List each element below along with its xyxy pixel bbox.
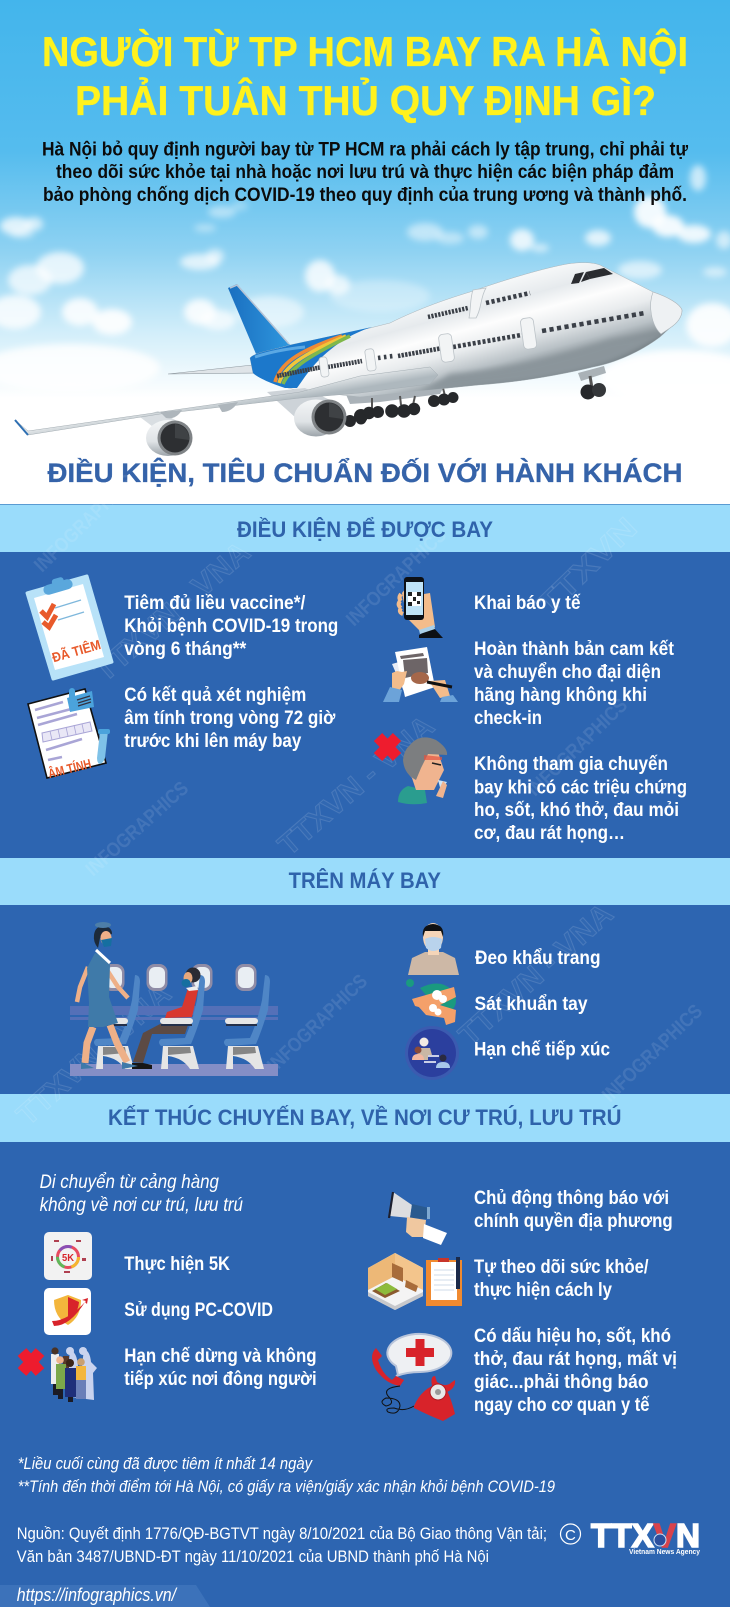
text: do not fly with symptoms: cơ, đau rát họng…: [474, 823, 625, 844]
text: notify local authority: chính quyền địa phương: [474, 1211, 673, 1232]
footnotes: [18, 1454, 555, 1496]
illustration: aircraft cabin with attendant and passenger: [70, 922, 278, 1076]
text: negative test condition: Có kết quả xét nghiệm: [124, 685, 306, 706]
icon: negative test document: [28, 688, 110, 781]
text: limit contact: Hạn chế tiếp xúc: [474, 1040, 610, 1060]
text: health declaration: Khai báo y tế: [474, 593, 581, 614]
text: notify local authority: Chủ động thông báo với: [474, 1188, 669, 1209]
text: vaccine condition: Khỏi bệnh COVID-19 trong: [124, 616, 338, 637]
text: notify local authority: [474, 1188, 673, 1232]
text: wear mask: Đeo khẩu trang: [475, 948, 600, 969]
heading: end of flight: KẾT THÚC CHUYẾN BAY, VỀ NƠI CƯ TRÚ, LƯU TRÚ: [108, 1105, 622, 1130]
icon: 5K card: [44, 1232, 92, 1280]
watermarks: INFOGRAPHICS: [598, 1000, 707, 1107]
text: do not fly with symptoms: bay khi có các triệu chứng: [474, 778, 687, 798]
text: avoid crowds: [124, 1346, 317, 1390]
watermarks: [11, 470, 707, 1132]
text: vaccine condition: [124, 593, 338, 660]
footer URL tab: https://infographics.vn/: [17, 1585, 178, 1605]
icon: sanitizing hands: [406, 979, 456, 1025]
text: negative test condition: [124, 685, 336, 752]
text: sanitize hands: Sát khuẩn tay: [474, 994, 588, 1015]
icon: limit contact: [405, 1026, 459, 1080]
text: vaccine condition: Tiêm đủ liều vaccine*/: [124, 593, 306, 614]
watermarks: INFOGRAPHICS: [263, 970, 372, 1077]
watermarks: TTXVN - VNA: [11, 977, 178, 1132]
text: travelling from the airport: Di chuyển từ cảng hàng: [40, 1172, 219, 1193]
icon: man wearing mask: [408, 923, 459, 975]
watermarks: TTXVN: [531, 511, 644, 622]
icon: phone with QR code: [399, 577, 443, 638]
watermarks: INFOGRAPHICS: [342, 524, 451, 631]
source: Văn bản 3487/UBND-ĐT ngày 11/10/2021 của UBND thành phố Hà Nội: [17, 1547, 489, 1566]
logo: TTXVN: Vietnam News Agency: [629, 1549, 700, 1556]
watermarks: INFOGRAPHICS: [523, 694, 632, 801]
text: commitment: [474, 639, 675, 729]
icon: coughing man with red cross: [378, 737, 447, 804]
logo: TTXVN: TTXVN: [591, 1517, 700, 1554]
text: report symptoms: [474, 1326, 677, 1416]
text: avoid crowds: Hạn chế dừng và không: [124, 1346, 317, 1367]
text: self monitor health: thực hiện cách ly: [474, 1280, 612, 1301]
heading: on the plane: TRÊN MÁY BAY: [289, 868, 441, 893]
copyright mark: C: [565, 1527, 576, 1544]
watermarks: INFOGRAPHICS: [30, 470, 139, 577]
text: report symptoms: Có dấu hiệu ho, sốt, khó: [474, 1326, 671, 1347]
text: commitment: check-in: [474, 708, 542, 729]
icon: vaccinated clipboard: ĐÃ TIÊM: [50, 637, 102, 665]
panel: section backgrounds: [0, 504, 730, 1607]
icon: megaphone: [389, 1192, 447, 1245]
icon: telephone and medical speech bubble: [372, 1334, 455, 1421]
text: commitment: hãng hàng không khi: [474, 685, 647, 706]
text: self monitor health: [474, 1257, 649, 1301]
text: do not fly with symptoms: Không tham gia chuyến: [474, 754, 668, 775]
watermarks: TTXVN - VNA: [453, 897, 620, 1052]
text: report symptoms: ngay cho cơ quan y tế: [474, 1395, 650, 1416]
text: negative test condition: trước khi lên máy bay: [124, 731, 302, 752]
subtitle: passenger conditions: ĐIỀU KIỆN, TIÊU CHUẨN ĐỐI VỚI HÀNH KHÁCH: [48, 456, 682, 488]
text: 5K: Thực hiện 5K: [124, 1254, 230, 1275]
watermarks: TTXVN - VNA: [88, 535, 257, 688]
text: travelling from the airport: [40, 1172, 243, 1216]
icon: PC-COVID card: [44, 1288, 91, 1335]
title: [42, 27, 688, 124]
icon: room and clipboard: [368, 1253, 462, 1310]
icon: crowd with red cross: [22, 1347, 97, 1402]
text: commitment: và chuyển cho đại diện: [474, 662, 661, 683]
footnotes: **Tính đến thời điểm tới Hà Nội, có giấy ra viện/giấy xác nhận khỏi bệnh COVID-19: [18, 1477, 555, 1496]
text: PC-COVID: Sử dụng PC-COVID: [124, 1300, 273, 1321]
heading: conditions to fly: ĐIỀU KIỆN ĐỂ ĐƯỢC BAY: [237, 517, 493, 542]
source: Nguồn: Quyết định 1776/QĐ-BGTVT ngày 8/10/2021 của Bộ Giao thông Vận tải;: [17, 1524, 547, 1543]
title: PHẢI TUÂN THỦ QUY ĐỊNH GÌ?: [75, 76, 656, 124]
text: avoid crowds: tiếp xúc nơi đông người: [124, 1369, 317, 1390]
text: negative test condition: âm tính trong vòng 72 giờ: [124, 708, 336, 729]
icon: negative test document: ÂM TÍNH: [46, 756, 93, 781]
text: vaccine condition: vòng 6 tháng**: [124, 639, 247, 660]
text: do not fly with symptoms: [474, 754, 687, 844]
source: [17, 1524, 547, 1566]
watermarks: TTXVN - VNA: [272, 709, 441, 862]
intro text block: theo dõi sức khỏe tại nhà hoặc nơi lưu trú và thực hiện các biện pháp đảm: [56, 161, 674, 183]
text: do not fly with symptoms: ho, sốt, khó thở, đau mỏi: [474, 800, 679, 821]
sky background: [0, 0, 730, 504]
icon: 5K card: 5K: [62, 1253, 75, 1264]
footnotes: *Liều cuối cùng đã được tiêm ít nhất 14 ngày: [18, 1454, 313, 1473]
watermarks: INFOGRAPHICS: [82, 777, 193, 881]
text: report symptoms: thở, đau rát họng, mất vị: [474, 1349, 677, 1370]
icon: hands signing commitment: [383, 647, 458, 702]
intro text block: [42, 138, 689, 206]
text: travelling from the airport: không về nơi cư trú, lưu trú: [40, 1195, 243, 1216]
text: report symptoms: giác...phải thông báo: [474, 1372, 648, 1393]
airplane illustration: [15, 263, 682, 456]
text: self monitor health: Tự theo dõi sức khỏe/: [474, 1257, 649, 1278]
copyright mark: [560, 1524, 580, 1544]
icon: vaccinated clipboard: [27, 576, 112, 679]
text: commitment: Hoàn thành bản cam kết: [474, 639, 675, 660]
